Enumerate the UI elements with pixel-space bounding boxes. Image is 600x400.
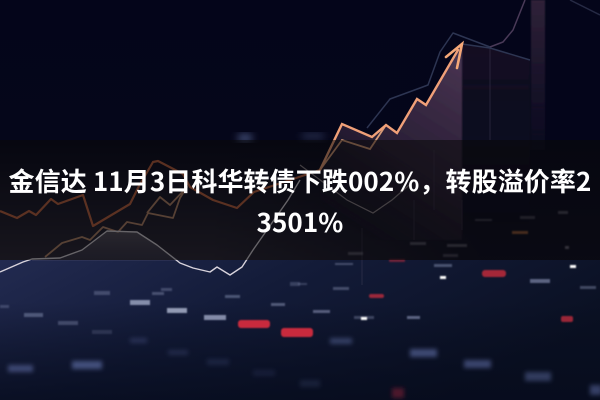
title: 3501% bbox=[257, 203, 343, 240]
blue-grey upper trend line bbox=[367, 0, 600, 128]
rising orange arrow bbox=[320, 44, 462, 170]
small background glows bbox=[238, 133, 324, 142]
grey and white data labels on floor bbox=[0, 263, 596, 334]
dark sky backdrop bbox=[0, 0, 600, 262]
red highlighted data labels bbox=[238, 259, 573, 337]
left orange trend lines bbox=[0, 161, 320, 257]
purple area under rising line bbox=[320, 0, 545, 240]
faint vertical grid lines bbox=[362, 48, 490, 285]
blurred foreground data labels bbox=[8, 338, 600, 398]
white trend line with mountain bbox=[0, 180, 300, 275]
dark translucent title band bbox=[0, 140, 600, 260]
faint labels in dark band bbox=[348, 211, 569, 257]
blue perspective floor bbox=[0, 260, 600, 400]
title bbox=[9, 162, 591, 240]
title: 金信达 11月3日科华转债下跌002%，转股溢价率2 bbox=[9, 162, 591, 199]
diamond line shape bbox=[300, 165, 415, 213]
